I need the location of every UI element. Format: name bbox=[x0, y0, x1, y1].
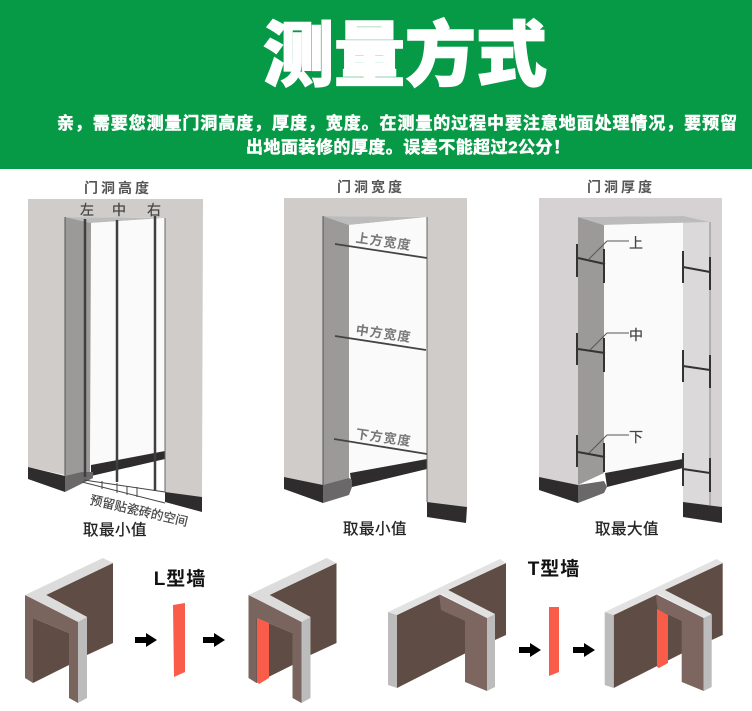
labels: top middle bottom bbox=[629, 235, 643, 445]
reserved tile space marker bbox=[82, 480, 165, 503]
labels: left middle right: 右 bbox=[147, 202, 161, 218]
arrow bbox=[135, 633, 157, 647]
labels: top middle bottom width bbox=[355, 230, 412, 449]
panel: door opening width bbox=[284, 179, 467, 538]
labels: left middle right: 左 bbox=[80, 202, 94, 218]
wall and opening bbox=[28, 199, 203, 512]
heading: T wall: T型墙 bbox=[528, 558, 580, 580]
result: minimum: 取最小值 bbox=[343, 520, 407, 538]
heading: thickness: 门洞厚度 bbox=[587, 179, 655, 195]
measuring lines bbox=[334, 244, 427, 454]
T wall before bbox=[388, 559, 506, 691]
panel: door opening height bbox=[28, 180, 203, 539]
labels: top middle bottom width: 下方宽度 bbox=[355, 426, 412, 449]
labels: left middle right: 中 bbox=[112, 202, 126, 218]
labels: top middle bottom: 下 bbox=[629, 429, 643, 445]
header banner bbox=[0, 0, 752, 169]
diagram: T-shaped wall bbox=[388, 558, 723, 691]
leader lines bbox=[588, 241, 629, 453]
diagram: L-shaped wall bbox=[25, 558, 336, 703]
arrow bbox=[203, 633, 225, 647]
heading: width: 门洞宽度 bbox=[337, 179, 405, 195]
result: minimum: 取最小值 bbox=[83, 521, 147, 539]
panel: door opening thickness bbox=[539, 179, 722, 538]
labels: top middle bottom: 上 bbox=[629, 235, 643, 251]
labels: top middle bottom width: 上方宽度 bbox=[355, 230, 412, 253]
T wall after bbox=[605, 559, 723, 691]
red filler piece bbox=[549, 607, 559, 676]
labels: top middle bottom width: 中方宽度 bbox=[355, 322, 412, 345]
subtitle text: 亲，需要您测量门洞高度，厚度，宽度。在测量的过程中要注意地面处理情况，要预留 bbox=[57, 113, 737, 133]
title: 测量方式 bbox=[263, 17, 547, 96]
subtitle text: 出地面装修的厚度。误差不能超过2公分！ bbox=[246, 137, 570, 157]
heading: height: 门洞高度 bbox=[84, 180, 152, 196]
arrow bbox=[519, 643, 541, 657]
result: maximum: 取最大值 bbox=[595, 520, 659, 538]
labels: top middle bottom: 中 bbox=[629, 327, 643, 343]
subtitle text bbox=[57, 113, 737, 157]
labels: left middle right bbox=[80, 202, 161, 218]
measuring lines bbox=[85, 216, 155, 491]
heading: L wall: L型墙 bbox=[154, 568, 206, 590]
L wall before bbox=[25, 558, 113, 703]
calipers: right jamb bbox=[683, 251, 710, 492]
wall and opening bbox=[284, 198, 467, 523]
wall and opening bbox=[539, 198, 722, 523]
red filler piece bbox=[173, 603, 185, 677]
label: reserved tile space: 预留贴瓷砖的空间 bbox=[89, 492, 189, 529]
calipers: left jamb bbox=[577, 244, 605, 472]
arrow bbox=[573, 643, 595, 657]
L wall after bbox=[248, 558, 336, 703]
